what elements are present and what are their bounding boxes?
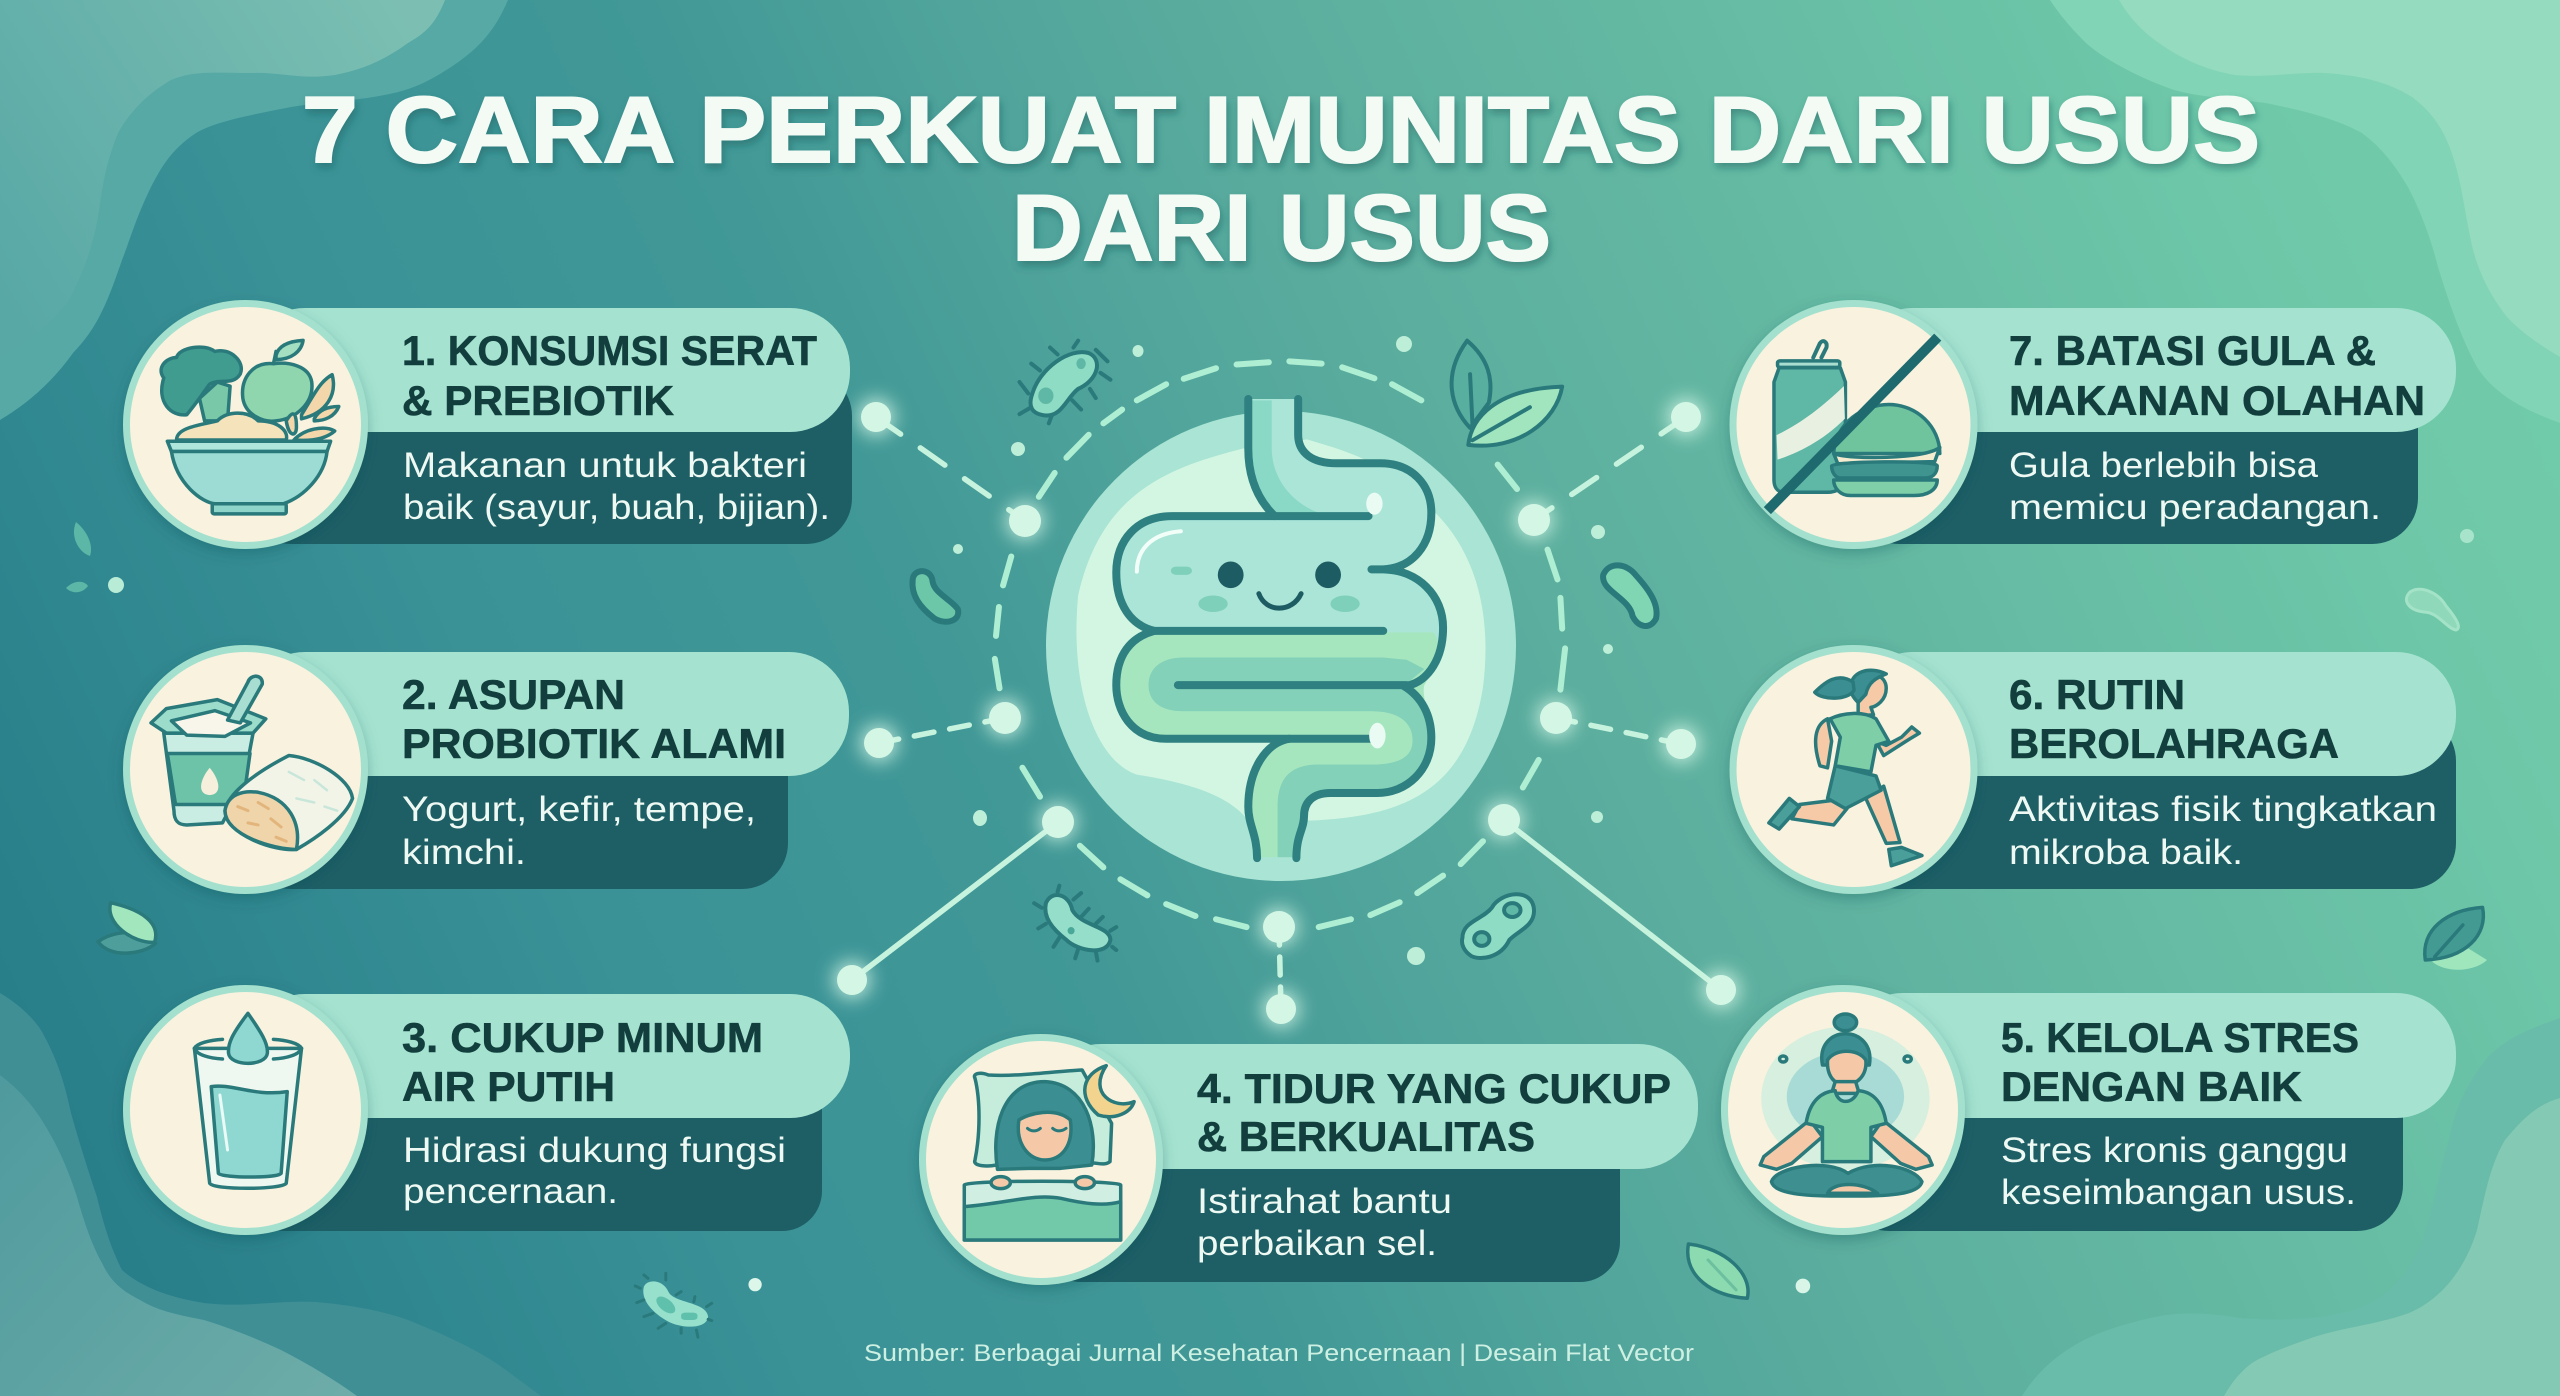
dark description panel [1843,1057,2403,1231]
description: memicu peradangan. [2009,488,2381,527]
heading [402,1014,763,1110]
microbe bottom left [1045,895,1110,950]
description: keseimbangan usus. [2001,1173,2356,1212]
heading: 5. KELOLA STRES [2001,1014,2359,1061]
dashed ring [995,361,1565,927]
icon badge: no soda or burger [1733,304,1974,546]
light heading pill [1041,1044,1698,1169]
tube outline [1116,399,1443,858]
heading [2009,327,2425,424]
background blob: top left [0,0,508,420]
description: Gula berlebih bisa [2009,446,2319,485]
panel: card 7 [1733,304,2456,546]
heading: & PREBIOTIK [402,377,674,424]
description: Istirahat bantu [1197,1182,1452,1221]
panel: card 6 [1733,648,2456,890]
description: perbaikan sel. [1197,1224,1437,1263]
title: DARI USUS [1012,175,1551,280]
heading [402,327,817,424]
microbe bottom [643,1281,708,1327]
highlights [1137,531,1181,572]
icons: microbes and leaves around gut [912,341,1657,961]
light heading pill [245,994,850,1118]
icon badge: meditation [1724,988,1962,1232]
small leaves far left top [66,522,124,593]
heading [1197,1065,1671,1160]
description [2009,446,2381,527]
heading: 1. KONSUMSI SERAT [402,327,817,374]
description: pencernaan. [403,1172,618,1211]
description [2001,1131,2356,1212]
face [1218,562,1244,588]
background blob: top right [2050,0,2560,423]
description: Hidrasi dukung fungsi [403,1131,786,1170]
heading: 4. TIDUR YANG CUKUP [1197,1065,1671,1112]
lower tube colour [1118,632,1438,857]
heading: & BERKUALITAS [1197,1113,1535,1160]
title [302,77,2260,280]
panel: card 2 [126,648,849,890]
footer source: Sumber: Berbagai Jurnal Kesehatan Pencernaan | Desain Flat Vector [864,1340,1694,1367]
light heading pill [1853,652,2456,776]
panel: card 3 [126,988,850,1232]
icon badge: glass of water [126,988,364,1232]
light heading pill [1853,308,2456,432]
light heading pill [245,652,849,776]
background blob: bottom left [0,993,541,1396]
dark description panel [245,715,788,889]
microbe bottom right [1462,894,1534,958]
microbe top left [1030,352,1097,416]
description: Makanan untuk bakteri [403,446,807,485]
heading: 2. ASUPAN [402,671,625,718]
description [403,446,830,527]
leaves top right [1452,341,1490,428]
leaf bottom centre right and leaf right [1688,907,2487,1298]
central diagram: gut with radiating network [833,336,1740,1028]
heading: DENGAN BAIK [2001,1063,2302,1110]
icon badge: sleeping person [922,1038,1160,1282]
description [2009,790,2437,872]
heading: BEROLAHRAGA [2009,720,2339,767]
dark description panel [1853,370,2418,544]
heading [2001,1014,2359,1110]
description [402,790,756,872]
description: Stres kronis ganggu [2001,1131,2348,1170]
light heading pill [1843,993,2456,1118]
heading: PROBIOTIK ALAMI [402,720,786,767]
dark description panel [1853,715,2456,889]
fold lines [1154,516,1407,739]
upper tube band [1250,400,1319,515]
dot and bean far right [2406,529,2474,630]
description [1197,1182,1452,1263]
side decorations [66,522,2487,1337]
dark description panel [245,370,852,544]
connector lines [852,417,1721,1009]
heading: AIR PUTIH [402,1063,615,1110]
network nodes [833,398,1740,1028]
inner tube band [1149,658,1430,857]
icon badge: runner [1733,648,1974,890]
heading [402,671,786,767]
heading: 7. BATASI GULA & [2009,327,2376,374]
title: 7 CARA PERKUAT IMUNITAS DARI USUS [302,77,2260,182]
icon: smiling intestine [1116,399,1443,858]
dark description panel [245,1057,822,1231]
description: mikroba baik. [2009,833,2243,872]
heading: 3. CUKUP MINUM [402,1014,763,1061]
heading: MAKANAN OLAHAN [2009,377,2425,424]
heading: 6. RUTIN [2009,671,2185,718]
icon badge: yogurt and tempeh [126,648,364,890]
description: kimchi. [402,833,526,872]
ambient dots centre [953,336,1613,965]
description: Yogurt, kefir, tempe, [402,790,756,829]
gut backdrop circle [1046,411,1516,881]
description [403,1131,786,1211]
description: Aktivitas fisik tingkatkan [2009,790,2437,829]
dark description panel [1041,1108,1620,1282]
bean right [1603,565,1657,626]
heading [2009,671,2339,767]
leaves far left [98,903,762,1337]
bean left [912,571,958,622]
panel: card 1 [126,304,852,546]
panel: card 4 [922,1038,1698,1282]
background blob: bottom right [2022,1018,2560,1396]
icon badge: fibre food [126,304,364,546]
panel: card 5 [1724,988,2456,1232]
light heading pill [245,308,850,432]
description: baik (sayur, buah, bijian). [403,488,830,527]
